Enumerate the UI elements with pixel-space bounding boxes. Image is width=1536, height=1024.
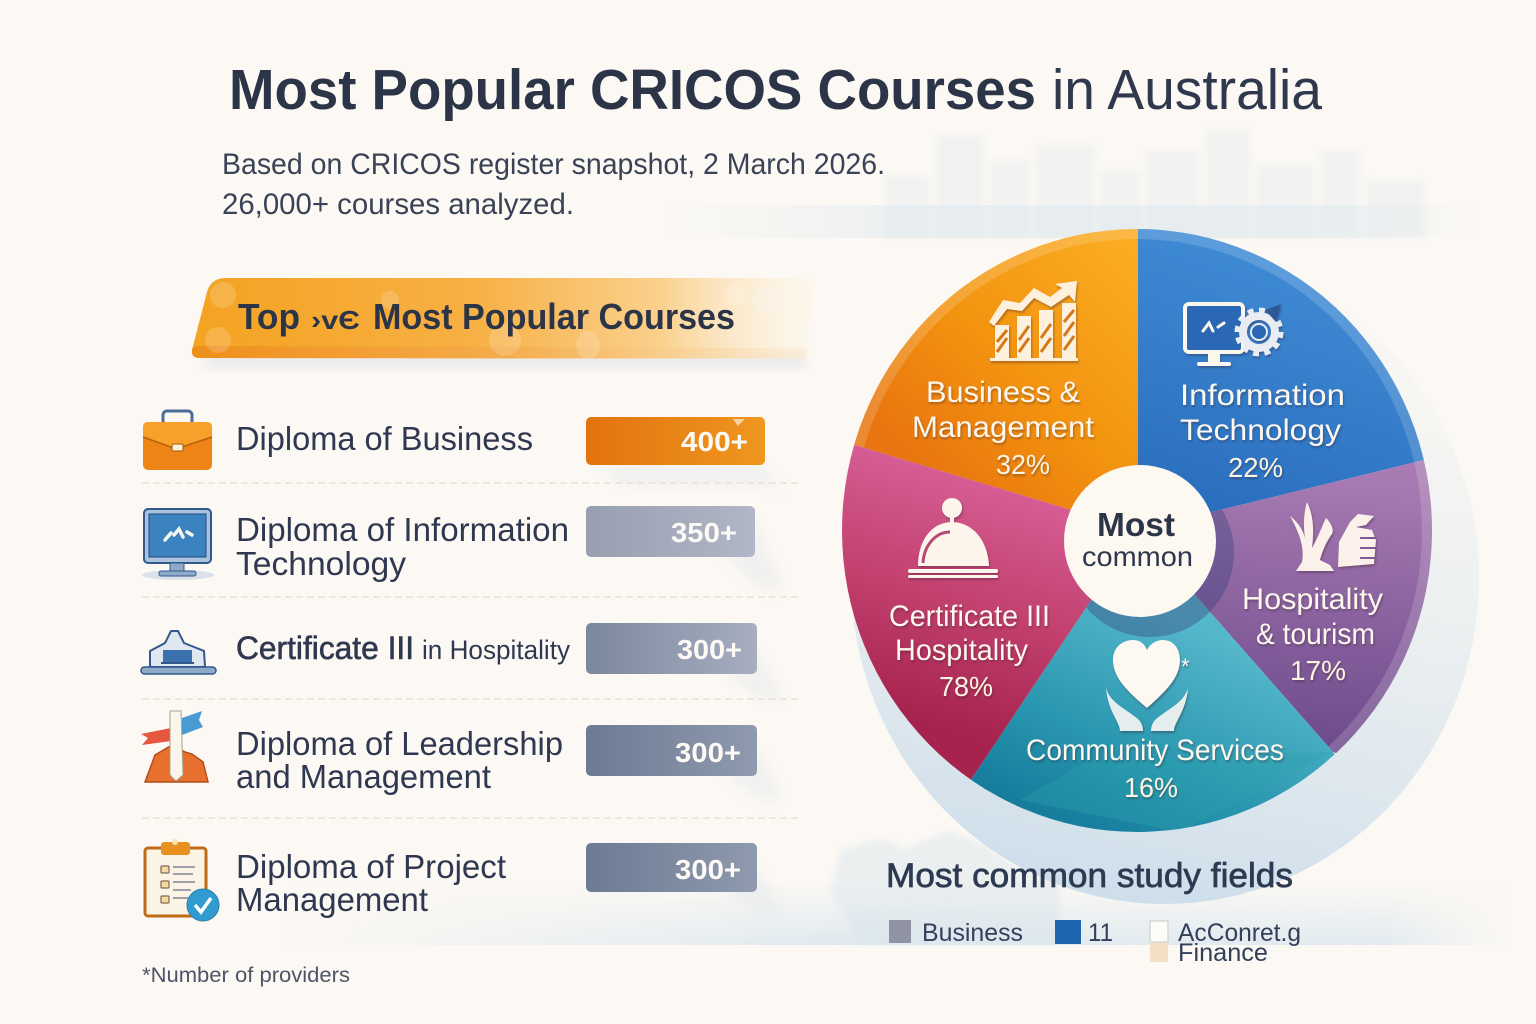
legend item: accounting: AcConret.g xyxy=(1178,919,1301,947)
bar: 300+: 300+ xyxy=(675,854,741,885)
slice label: Certificate III Hospitality 78%: Certificate III xyxy=(889,600,1050,633)
label xyxy=(236,511,569,582)
slice label: Business & Management 32%: Business & xyxy=(926,376,1080,409)
slice label: Certificate III Hospitality 78%: 78% xyxy=(939,671,993,702)
bar shadows xyxy=(600,465,785,915)
footnote: *Number of providers xyxy=(142,964,350,987)
chart: pie of study fields xyxy=(842,229,1432,832)
row 1: Diploma of Business xyxy=(143,411,765,470)
slice label: Hospitality & tourism 17%: 17% xyxy=(1290,655,1346,686)
label: Diploma of Project xyxy=(236,848,506,885)
slice: Business & Management xyxy=(854,229,1138,510)
slice label: Certificate III Hospitality 78% xyxy=(889,600,1050,702)
row 4: Diploma of Leadership and Management xyxy=(141,711,757,795)
bar: 300+: 300+ xyxy=(675,737,741,768)
slice label: Community Services 16%: Community Services xyxy=(1026,734,1284,767)
slice label: Community Services 16% xyxy=(1026,734,1284,803)
bar: 400+: 400+ xyxy=(681,426,748,457)
icon: flags on summit xyxy=(141,711,208,782)
slice label: Information Technology 22% xyxy=(1180,379,1345,483)
subtitle xyxy=(222,148,885,221)
label xyxy=(236,630,570,666)
subtitle: Based on CRICOS register snapshot, 2 March 2026. xyxy=(222,148,885,181)
icon: monitor xyxy=(142,509,214,580)
center label: common xyxy=(1082,541,1193,572)
icon: heart in hands: * xyxy=(1181,654,1190,679)
icon: clipboard with check xyxy=(145,839,219,921)
label: Certificate III xyxy=(236,630,414,666)
slice label: Information Technology 22%: 22% xyxy=(1228,452,1283,483)
bar: 350+ xyxy=(586,506,755,557)
legend xyxy=(889,919,1301,967)
slice: Certificate III Hospitality xyxy=(842,444,1092,780)
label: Diploma of Information xyxy=(236,511,569,548)
slice label: Business & Management 32%: 32% xyxy=(996,449,1050,480)
label: in Hospitality xyxy=(422,635,570,665)
icon: growth chart xyxy=(989,281,1078,361)
bar: 400+ xyxy=(586,417,765,465)
pie ghost shadow xyxy=(851,252,1479,904)
background haze behind legend xyxy=(280,830,1510,945)
slice label: Hospitality & tourism 17%: Hospitality xyxy=(1242,583,1383,616)
slice label: Certificate III Hospitality 78%: Hospitality xyxy=(895,634,1028,667)
bar: 300+ xyxy=(586,843,757,892)
panel: top five banner xyxy=(192,278,815,368)
slice label: Information Technology 22%: Information xyxy=(1180,379,1345,412)
icon: plant and hand xyxy=(1290,502,1376,571)
label xyxy=(236,725,563,795)
center label: Most xyxy=(1097,506,1175,543)
icon: heart in hands xyxy=(1106,640,1190,731)
label xyxy=(236,848,506,918)
bar: 300+ xyxy=(586,623,757,674)
title: Most Popular CRICOS Courses xyxy=(229,58,1036,122)
label: Technology xyxy=(236,545,407,582)
row 2: Diploma of Information Technology xyxy=(142,506,755,582)
slice label: Information Technology 22%: Technology xyxy=(1180,414,1341,447)
slice label: Business & Management 32% xyxy=(912,376,1095,480)
bar: 350+: 350+ xyxy=(671,517,737,548)
bar: 300+: 300+ xyxy=(677,634,742,665)
slice label: Business & Management 32%: Management xyxy=(912,411,1095,444)
banner heading: Top xyxy=(238,296,300,337)
icon: briefcase xyxy=(143,411,212,470)
banner heading: ›vЄ xyxy=(311,305,360,335)
slice: Hospitality & tourism xyxy=(1194,460,1432,754)
slice label: Hospitality & tourism 17% xyxy=(1242,583,1383,686)
slice: Community Services xyxy=(971,594,1334,832)
icon: monitor and gear xyxy=(1185,304,1281,366)
slice label: Hospitality & tourism 17%: & tourism xyxy=(1256,618,1375,651)
legend item: 11 xyxy=(1055,919,1113,947)
banner heading: Most Popular Courses xyxy=(373,296,735,337)
label: Management xyxy=(236,881,428,918)
subtitle: 26,000+ courses analyzed. xyxy=(222,188,574,221)
heading: most common study fields: Most common study fields xyxy=(886,857,1293,895)
label: Diploma of Business xyxy=(236,420,533,457)
label: Diploma of Leadership xyxy=(236,725,563,762)
row dividers xyxy=(142,483,802,818)
legend item: 11: 11 xyxy=(1088,919,1113,947)
bar: 300+ xyxy=(586,725,757,776)
center label xyxy=(1064,465,1216,617)
slice: Information Technology xyxy=(1138,229,1424,512)
icon: cloche xyxy=(908,498,998,578)
legend item: Business: Business xyxy=(922,919,1023,947)
legend item: Finance: Finance xyxy=(1178,939,1268,967)
slice label: Community Services 16%: 16% xyxy=(1124,772,1178,803)
row 3: Certificate III in Hospitality xyxy=(141,623,757,674)
row 5: Diploma of Project Management xyxy=(145,839,757,921)
title: in Australia xyxy=(1052,58,1322,122)
icon: hospitality cloche xyxy=(141,631,216,674)
label: and Management xyxy=(236,758,491,795)
background skyline xyxy=(660,130,1480,238)
